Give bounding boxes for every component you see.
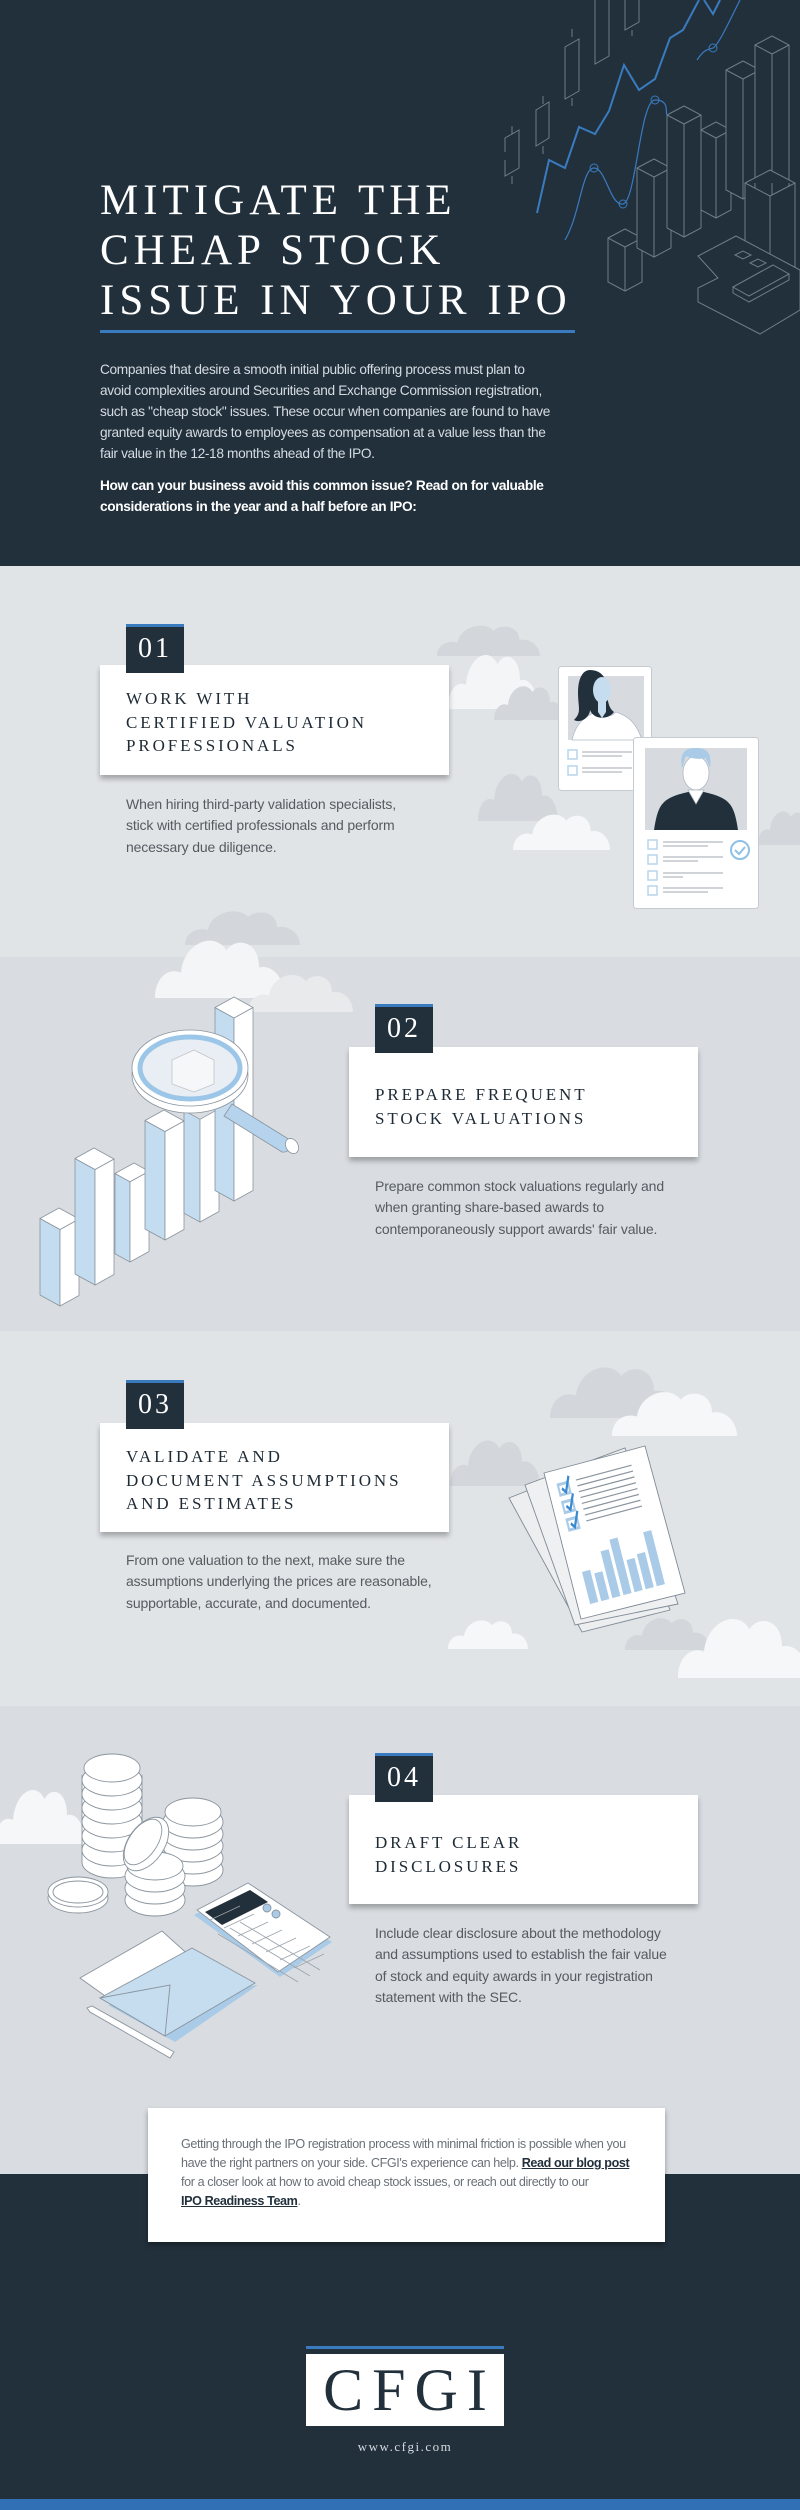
- step 2 badge: [375, 1004, 433, 1053]
- step 4 text: of stock and equity awards in your registration: [375, 1968, 653, 1984]
- title: [100, 177, 572, 324]
- step 3 text: assumptions underlying the prices are reasonable,: [126, 1573, 432, 1589]
- callout: closing text: IPO Readiness Team.: [181, 2194, 301, 2208]
- illustration: city skyline chart: [504, 0, 800, 334]
- step 2 heading card: PREPARE FREQUENT: [375, 1085, 588, 1104]
- icon: checklist documents: [509, 1446, 685, 1632]
- step 4 heading card: [349, 1795, 698, 1904]
- footer panel: [0, 2174, 800, 2510]
- step 1 heading card: [100, 665, 449, 775]
- step 4 badge: 04: [387, 1762, 421, 1793]
- step 4 text: Include clear disclosure about the methodology: [375, 1925, 661, 1941]
- intro paragraph: granted equity awards to employees as compensation at a value less than the: [100, 425, 546, 440]
- title underline: [100, 330, 575, 333]
- step 2 heading card: [349, 1047, 698, 1157]
- callout: closing text: [148, 2108, 665, 2242]
- step 1 text: When hiring third-party validation specialists,: [126, 796, 396, 812]
- panel: step 3: [0, 1331, 800, 1706]
- intro paragraph: Companies that desire a smooth initial public offering process must plan to: [100, 362, 525, 377]
- step 1 badge: 01: [138, 633, 172, 664]
- step 4 heading card: DRAFT CLEAR: [375, 1833, 522, 1852]
- intro paragraph: fair value in the 12-18 months ahead of the IPO.: [100, 446, 375, 461]
- step 1 badge: [126, 624, 184, 673]
- step 3 heading card: AND ESTIMATES: [126, 1494, 296, 1513]
- step 2 text: when granting share-based awards to: [375, 1199, 604, 1215]
- icon: bar chart with magnifier: [40, 997, 301, 1306]
- icon: coins, calculator and envelope: [48, 1754, 332, 2058]
- step 2 text: Prepare common stock valuations regularly and: [375, 1178, 664, 1194]
- panel: step 1: [0, 566, 800, 957]
- step 1 heading card: CERTIFIED VALUATION: [126, 712, 367, 732]
- intro question: [100, 478, 544, 514]
- panel: step 2: [0, 957, 800, 1331]
- intro question: considerations in the year and a half before an IPO:: [100, 499, 416, 514]
- callout: closing text: Getting through the IPO registration process with minimal friction is possible when you: [181, 2137, 626, 2151]
- step 4 text: statement with the SEC.: [375, 1989, 522, 2005]
- step 1 heading card: WORK WITH: [126, 689, 252, 708]
- step 3 text: supportable, accurate, and documented.: [126, 1595, 371, 1611]
- logo: CFGI: CFGI: [323, 2357, 496, 2423]
- header panel: [0, 0, 800, 566]
- callout: closing text: for a closer look at how to avoid cheap stock issues, or reach out directly to our: [181, 2175, 589, 2189]
- step 3 heading card: [100, 1423, 449, 1532]
- step 3 text: [126, 1552, 432, 1611]
- step 2 text: [375, 1178, 664, 1237]
- intro paragraph: such as "cheap stock" issues. These occur when companies are found to have: [100, 404, 550, 419]
- step 4 text: and assumptions used to establish the fair value: [375, 1946, 667, 1962]
- bottom blue bar: [0, 2499, 800, 2510]
- step 4 text: [375, 1925, 667, 2005]
- step 3 heading card: VALIDATE AND: [126, 1447, 283, 1466]
- step 3 badge: [126, 1380, 184, 1429]
- panel: step 4: [0, 1706, 800, 2174]
- title: MITIGATE THE: [100, 177, 457, 224]
- step 4 badge: [375, 1753, 433, 1802]
- icon: candidate profile cards: [558, 666, 758, 908]
- intro paragraph: avoid complexities around Securities and Exchange Commission registration,: [100, 383, 542, 398]
- title: ISSUE IN YOUR IPO: [100, 277, 572, 324]
- step 1 text: [126, 796, 396, 855]
- title: CHEAP STOCK: [100, 227, 445, 274]
- step 4 heading card: DISCLOSURES: [375, 1856, 521, 1876]
- step 2 badge: 02: [387, 1013, 421, 1044]
- step 3 badge: 03: [138, 1389, 172, 1420]
- step 1 heading card: PROFESSIONALS: [126, 736, 298, 755]
- intro question: How can your business avoid this common issue? Read on for valuable: [100, 478, 544, 493]
- step 2 text: contemporaneously support awards' fair value.: [375, 1221, 657, 1237]
- intro paragraph: [100, 362, 550, 461]
- step 2 heading card: STOCK VALUATIONS: [375, 1108, 586, 1128]
- callout: closing text: have the right partners on your side. CFGI's experience can help. Read our blog post: [181, 2156, 629, 2170]
- step 3 text: From one valuation to the next, make sure the: [126, 1552, 405, 1568]
- step 1 text: stick with certified professionals and perform: [126, 817, 395, 833]
- website url: www.cfgi.com: [358, 2439, 452, 2454]
- step 1 text: necessary due diligence.: [126, 839, 276, 855]
- step 3 heading card: DOCUMENT ASSUMPTIONS: [126, 1470, 401, 1490]
